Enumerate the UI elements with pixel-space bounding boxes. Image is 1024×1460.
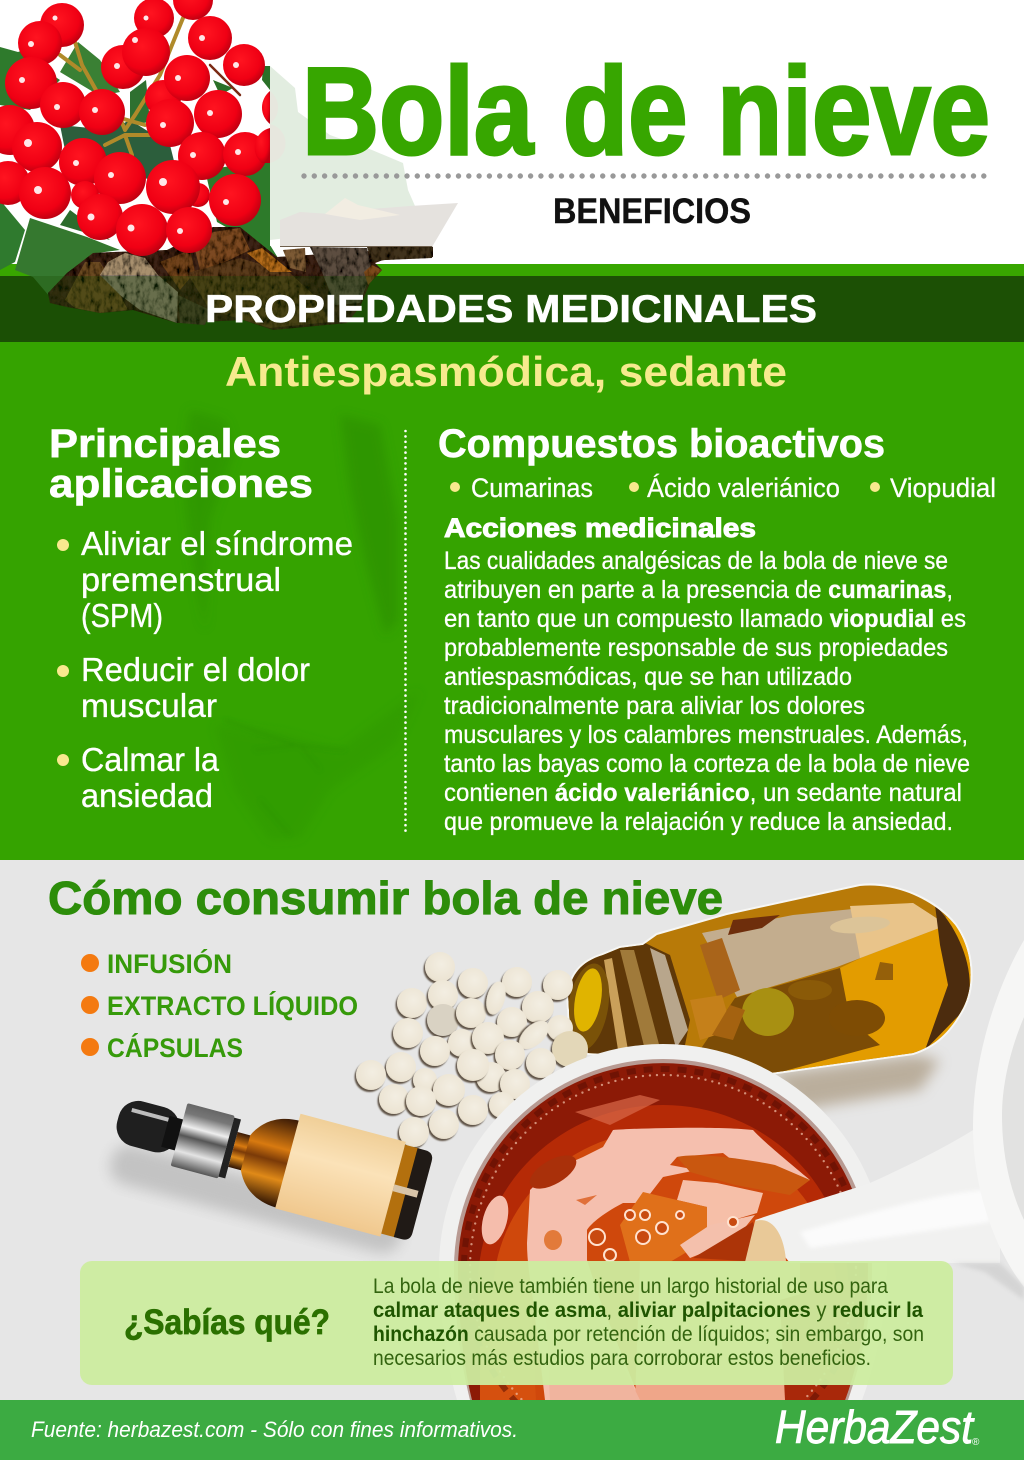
text block: medicinal actions: probablemente responsable de sus propiedades	[444, 634, 948, 662]
text block: medicinal actions: tanto las bayas como la corteza de la bola de nieve	[444, 750, 970, 778]
panel: medicinal properties	[0, 342, 1024, 860]
plate on right	[973, 940, 1024, 1287]
logo registered mark: ®	[972, 1437, 980, 1448]
text block: medicinal actions	[444, 547, 970, 836]
list: bioactive compounds: Ácido valeriánico	[647, 473, 840, 503]
dotted divider	[304, 173, 990, 179]
heading: how to consume: Cómo consumir bola de nieve	[48, 872, 723, 924]
dark band: propiedades medicinales background	[0, 276, 1024, 342]
callout text	[373, 1275, 924, 1370]
source note: Fuente: herbazest.com - Sólo con fines informativos.	[31, 1417, 518, 1442]
list: applications: Calmar la	[81, 741, 220, 778]
heading: principales aplicaciones: aplicaciones	[49, 462, 313, 506]
list: forms of consumption: EXTRACTO LÍQUIDO	[107, 990, 358, 1021]
subtitle: BENEFICIOS	[553, 192, 751, 231]
rim bubbles	[469, 1074, 842, 1400]
band heading: PROPIEDADES MEDICINALES	[205, 288, 817, 331]
background photo: woman silhouette	[186, 417, 396, 833]
callout heading: ¿Sabías qué?	[124, 1303, 330, 1342]
footer	[0, 1400, 1024, 1460]
heading: principales aplicaciones: Principales	[49, 422, 281, 466]
photo: snowball berries, leaves and bark	[0, 0, 458, 330]
faded white overlay on the photo	[270, 66, 470, 246]
callout text: La bola de nieve también tiene un largo historial de uso para	[373, 1275, 888, 1298]
callout text: hinchazón causada por retención de líquidos; sin embargo, son	[373, 1323, 924, 1346]
callout: did you know	[80, 1261, 953, 1385]
heading: compuestos bioactivos: Compuestos bioactivos	[438, 422, 885, 466]
text block: medicinal actions: antiespasmódicas, que se han utilizado	[444, 663, 852, 691]
stems	[60, 18, 240, 155]
tea stream	[693, 1222, 754, 1261]
shadow under the handle	[962, 1262, 1024, 1298]
band tint over photo	[0, 276, 440, 342]
callout text: necesarios más estudios para corroborar estos beneficios.	[373, 1347, 871, 1370]
list: bioactive compounds	[450, 473, 996, 503]
list: forms of consumption: CÁPSULAS	[107, 1032, 243, 1063]
list: applications: ansiedad	[81, 777, 213, 814]
list: applications	[57, 525, 353, 814]
list: applications: (SPM)	[81, 597, 163, 634]
text block: medicinal actions: Las cualidades analgésicas de la bola de nieve se	[444, 547, 948, 575]
logo: HerbaZest: HerbaZest	[775, 1401, 975, 1453]
bottle with tablets	[568, 886, 971, 1073]
list: applications: Reducir el dolor	[81, 651, 310, 688]
bottle shadow	[770, 1055, 940, 1110]
list: applications: Aliviar el síndrome	[81, 525, 353, 562]
list: bioactive compounds: Viopudial	[890, 473, 996, 503]
panel: how to consume	[0, 860, 1024, 1400]
pink reflections in the tea	[527, 1128, 810, 1400]
tablets	[356, 952, 588, 1147]
bottle neck	[568, 943, 690, 1054]
callout text: calmar ataques de asma, aliviar palpitaciones y reducir la	[373, 1299, 923, 1322]
list: forms of consumption	[81, 948, 358, 1063]
dropper bottle	[106, 1100, 432, 1257]
berries	[0, 0, 270, 256]
faded leaf and bark behind overlay	[270, 66, 458, 247]
cup handle	[693, 1127, 1000, 1263]
faded berries past the overlay edge	[270, 91, 286, 163]
list: bioactive compounds: Cumarinas	[471, 473, 593, 503]
heading: principales aplicaciones	[49, 422, 313, 506]
text block: medicinal actions: tradicionalmente para aliviar los dolores	[444, 692, 865, 720]
text block: medicinal actions: que promueve la relajación y reduce la ansiedad.	[444, 808, 953, 836]
berry highlights	[19, 16, 241, 234]
header band: light green stripe	[0, 264, 1024, 276]
list: forms of consumption: INFUSIÓN	[107, 948, 232, 979]
list: applications: muscular	[81, 687, 217, 724]
text block: medicinal actions: musculares y los calambres menstruales. Además,	[444, 721, 968, 749]
spout opening	[745, 1220, 786, 1262]
subheading: acciones medicinales: Acciones medicinales	[444, 513, 756, 543]
bubbles	[589, 1210, 738, 1261]
text block: medicinal actions: en tanto que un compuesto llamado viopudial es	[444, 605, 966, 633]
leaves	[0, 42, 278, 297]
tagline: Antiespasmódica, sedante	[225, 348, 787, 395]
bark pieces	[48, 227, 433, 330]
bottle opening	[568, 964, 610, 1048]
text block: medicinal actions: contienen ácido valeriánico, un sedante natural	[444, 779, 962, 807]
dotted column divider	[404, 431, 407, 835]
bottle outline	[568, 885, 971, 1073]
list: applications: premenstrual	[81, 561, 281, 598]
photo: how to consume objects	[102, 880, 1024, 1460]
tea cup	[440, 1044, 870, 1400]
text block: medicinal actions: atribuyen en parte a la presencia de cumarinas,	[444, 576, 953, 604]
